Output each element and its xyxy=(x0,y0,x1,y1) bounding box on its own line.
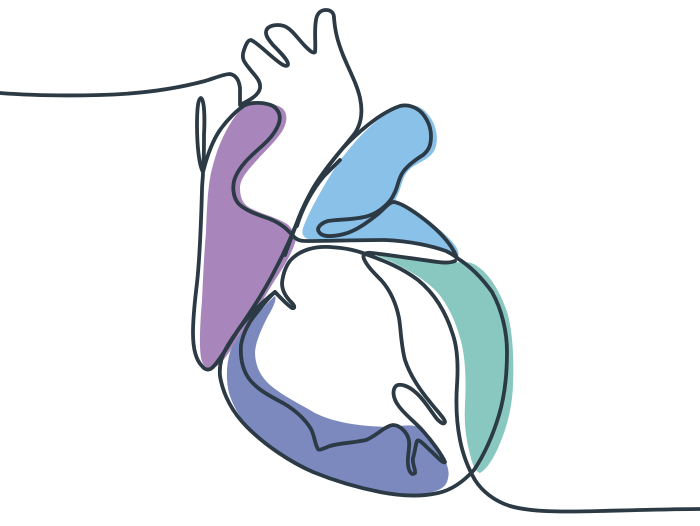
line: secondary overlap near septum xyxy=(297,160,340,226)
colour region: purple right atrium xyxy=(200,103,296,369)
line: blue chamber contour xyxy=(285,105,457,258)
colour region: blue left atrium xyxy=(302,105,458,258)
line: left vessel and aorta top xyxy=(0,10,457,370)
line: inner ventricle papillary and septum xyxy=(241,247,700,511)
colour region: teal left ventricle wall xyxy=(372,253,513,473)
colour region: indigo right ventricle wall xyxy=(227,296,449,495)
line: outer heart wall xyxy=(220,258,507,496)
